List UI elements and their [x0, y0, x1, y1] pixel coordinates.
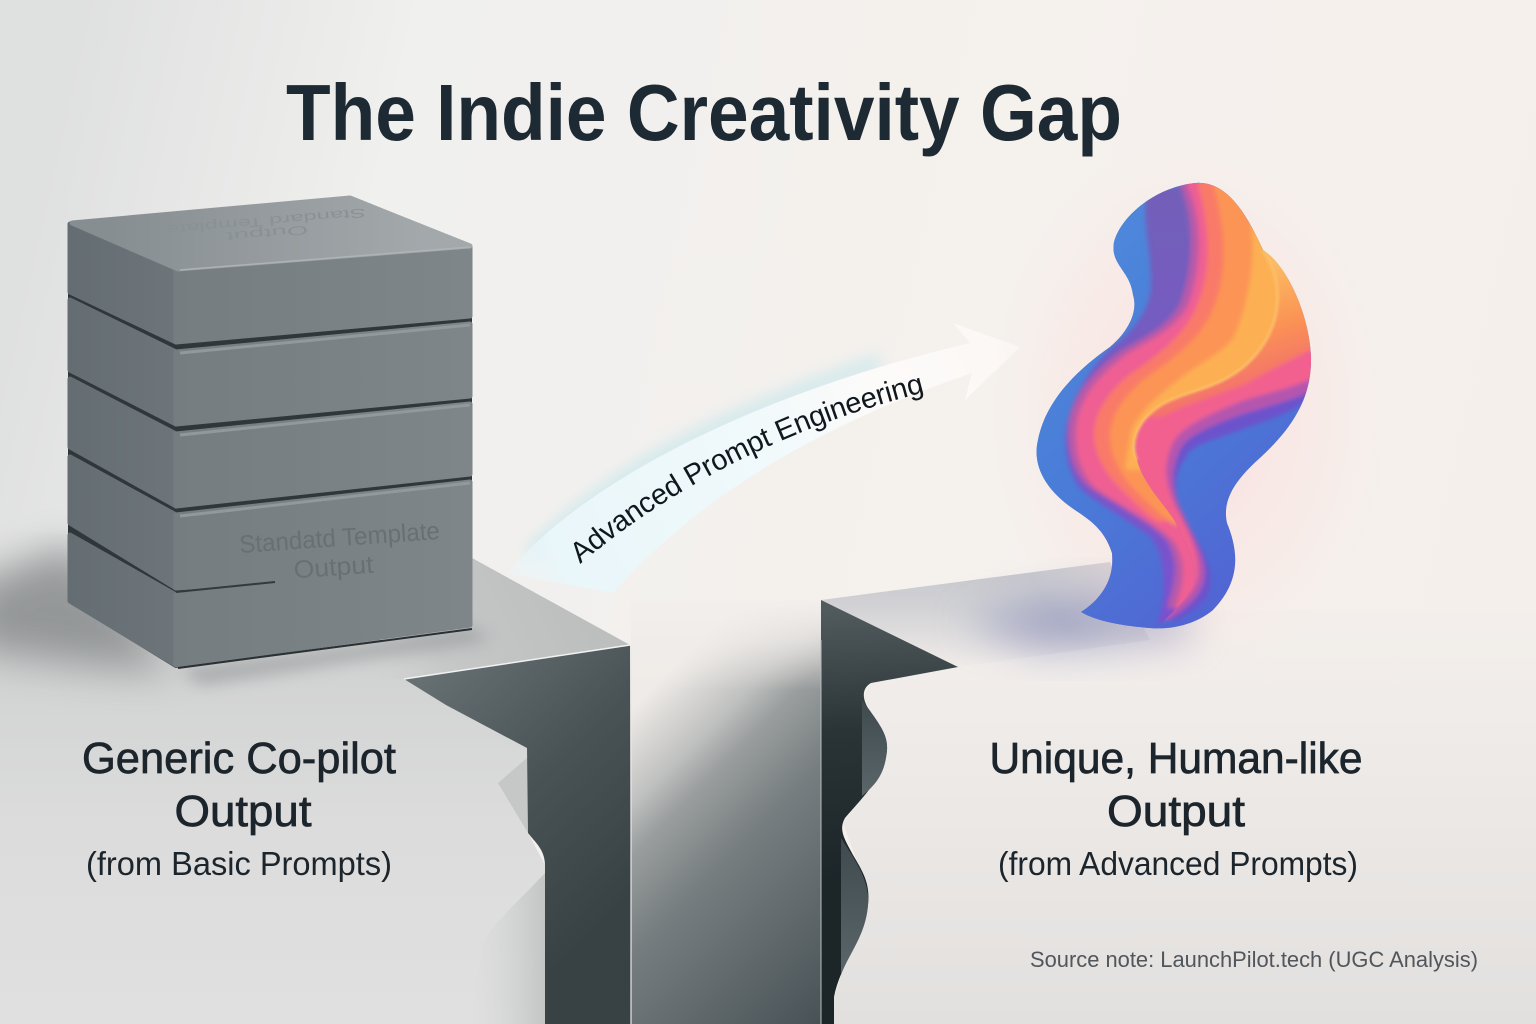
block 3	[70, 379, 470, 506]
block 1 top	[70, 198, 470, 342]
icon: colorful fluid shape	[1036, 182, 1312, 628]
embossed text on top block: Standard Template	[166, 205, 366, 237]
stack of template blocks	[70, 198, 472, 668]
panel: right ledge	[821, 562, 1536, 1024]
embossed text: Standard Template Output: Standatd Template	[238, 517, 441, 559]
left caption: Generic Co-pilot	[82, 734, 396, 783]
panel: right cliff face	[821, 600, 958, 1024]
ledge side shadow	[470, 757, 545, 1024]
lighter strip upper	[862, 700, 887, 796]
source note: Source note: LaunchPilot.tech (UGC Analysis)	[1030, 947, 1478, 972]
fold crease highlight	[1134, 250, 1278, 460]
arrow body	[507, 323, 1020, 593]
right caption: Unique, Human-like	[990, 734, 1362, 783]
embossed text on top block	[166, 205, 367, 249]
title: The Indie Creativity Gap	[286, 68, 1122, 157]
arrow glow	[530, 362, 880, 555]
block 4	[70, 457, 470, 592]
arrow label: Advanced Prompt Engineering	[574, 378, 924, 564]
lighter strip lower	[841, 838, 868, 975]
arrow: Advanced Prompt Engineering	[524, 324, 1002, 593]
embossed text: Standard Template Output: Output	[293, 551, 374, 584]
left caption: Output	[174, 787, 312, 836]
panel: left cliff face	[404, 645, 631, 1024]
right fold bands	[1098, 230, 1311, 622]
embossed text on top block: Output	[225, 223, 309, 244]
left caption: (from Basic Prompts)	[86, 845, 392, 882]
right caption: (from Advanced Prompts)	[998, 845, 1358, 882]
left caption	[82, 734, 396, 882]
left fold bands	[1036, 182, 1278, 628]
block 5	[70, 535, 472, 668]
embossed text: Standard Template Output	[238, 517, 443, 588]
right caption: Output	[1107, 787, 1245, 836]
panel: central gap	[631, 600, 821, 1024]
right caption	[990, 734, 1362, 882]
panel: left ledge	[0, 530, 630, 1024]
block 2	[70, 300, 470, 424]
icon: blob glow	[990, 135, 1390, 685]
